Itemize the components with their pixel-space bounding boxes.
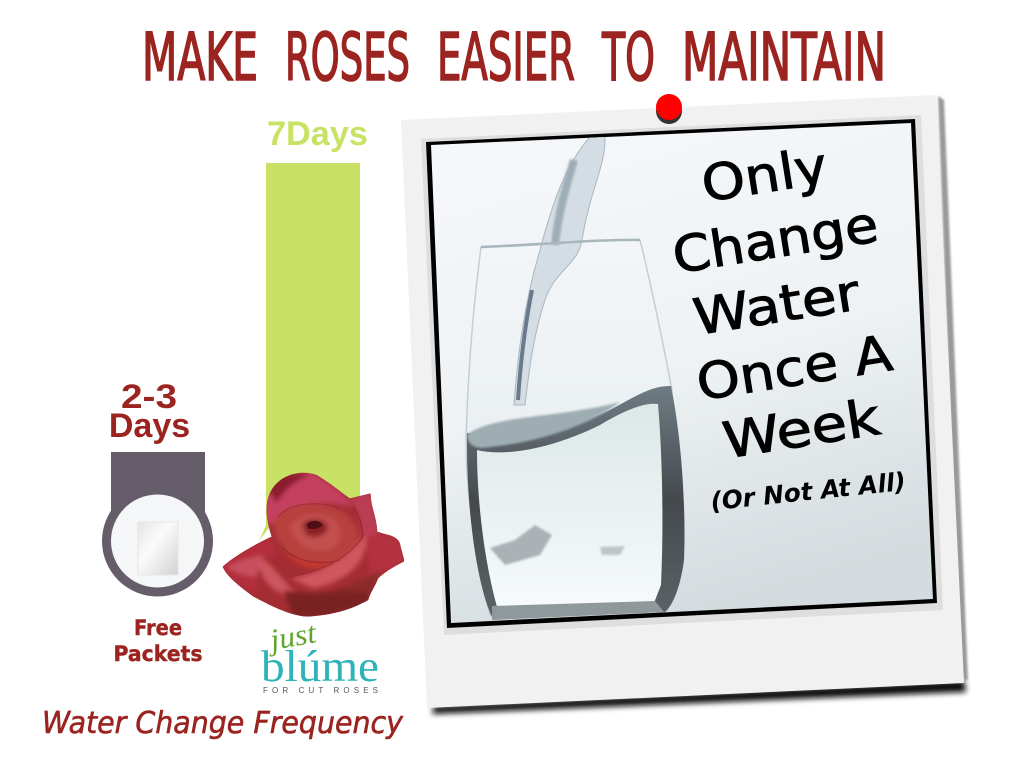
- title: [142, 19, 886, 96]
- title: MAKE: [142, 19, 258, 96]
- icon: packet in ring: [106, 490, 208, 592]
- logo: just blume: FOR CUT ROSES: [263, 686, 378, 695]
- photo headline: [669, 137, 896, 470]
- label: free packets: [114, 616, 202, 666]
- pin: [656, 94, 682, 124]
- title: EASIER: [437, 19, 575, 96]
- photo headline: Change: [669, 195, 882, 285]
- title: ROSES: [285, 19, 410, 96]
- title: MAINTAIN: [682, 19, 886, 96]
- logo: just blume: [261, 616, 379, 695]
- title: TO: [601, 19, 655, 96]
- caption: water change frequency: Water Change Frequency: [42, 706, 404, 741]
- photo: water glass: [420, 115, 950, 635]
- label: 2-3 days: [109, 378, 190, 445]
- bar: free packets 2-3 days: [111, 452, 205, 522]
- icon: rose: [222, 472, 404, 617]
- panel: polaroid photo: [401, 95, 968, 714]
- logo: just blume: blúme: [261, 642, 379, 691]
- label: free packets: Free: [134, 616, 182, 640]
- logo: just blume: just: [263, 616, 319, 658]
- photo subheading: (Or Not At All): [709, 467, 907, 516]
- photo headline: Only: [698, 137, 831, 214]
- photo headline: Once A: [693, 324, 896, 412]
- label: 2-3 days: 2-3: [121, 378, 177, 416]
- photo headline: Water: [689, 263, 864, 347]
- photo headline: Week: [719, 388, 884, 470]
- label: 7 days: 7Days: [267, 115, 368, 153]
- label: free packets: Packets: [114, 642, 202, 666]
- bar: just blume 7 days: [259, 163, 360, 541]
- label: 2-3 days: Days: [109, 407, 190, 445]
